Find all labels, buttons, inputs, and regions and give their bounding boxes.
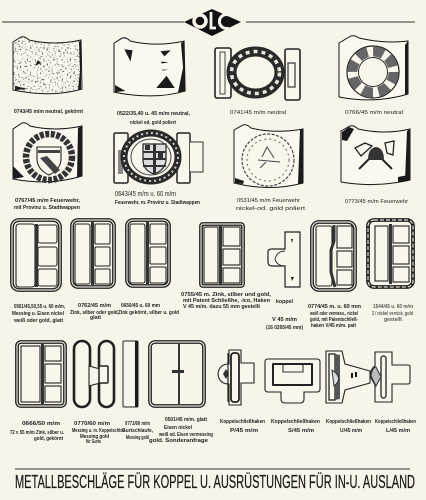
caption 0501 (149, 417, 213, 444)
caption 0773: 0773/45 m/m Feuerwehr (345, 199, 408, 205)
buckle 0501 (150, 342, 204, 406)
caption 0770: für Gurte (86, 439, 101, 445)
caption 0522 (117, 111, 191, 126)
caption hook L: L/45 m/m (386, 428, 410, 434)
buckle 0650 (127, 220, 169, 286)
caption 0561: weiß oder gold, glatt (13, 318, 63, 324)
caption 0762: Zink, silber oder gold, (70, 310, 120, 316)
caption 0522: 0522/35,40 u. 45 m/m neutral, (117, 111, 191, 117)
hook S (265, 359, 320, 403)
caption 0774: weiß oder vermess., nickel (309, 311, 358, 317)
caption hook P: Koppelschließhaken (220, 419, 265, 425)
caption 0531 (236, 198, 306, 212)
footer rule (15, 468, 410, 470)
caption 0643 (115, 191, 200, 206)
caption koppel (266, 299, 303, 331)
caption koppel: (16 0265/45 mm) (266, 325, 303, 331)
caption 0501: 0501/45 m/m. glatt (165, 417, 207, 423)
caption hook P: P/45 m/m (230, 428, 258, 434)
caption 0762: glatt (90, 315, 101, 321)
caption 0767 (14, 198, 81, 211)
caption 0522: nickel od. gold poliert (130, 120, 176, 126)
caption 0666: 0666/50 m/m (22, 421, 60, 427)
caption 0774: 0774/45 m. u. 60 mm (308, 304, 361, 310)
caption 0770: Messing gold (80, 434, 109, 440)
caption 0741: 0741/45 m/m neutral (230, 110, 286, 116)
caption 1544 (372, 304, 413, 323)
caption 0774: gold, mit Patentschließ- (310, 317, 358, 323)
plate 0767 with crest (13, 123, 82, 182)
caption 0762: 0762/45 m/m (78, 303, 111, 309)
caption 0755: mit Patent Schließhe, -ico, Haken (183, 298, 270, 304)
caption 0770: Messing u. m. Koppelschloß (72, 428, 126, 434)
caption 0650: 0650/45 u. 60 mm (121, 303, 160, 309)
caption 0666: gold, gekörnt (34, 436, 63, 442)
buckle 1544 (368, 220, 413, 287)
caption 0774 (308, 304, 361, 329)
plate 0766 with wheel (339, 36, 408, 100)
caption 0501: Eisen nickel (164, 425, 193, 431)
koppel hook V (268, 232, 300, 287)
plate 0773 with crossed axes and helmet (341, 126, 410, 185)
buckle 0741 with wreath (215, 48, 300, 100)
hook P (218, 350, 254, 405)
caption 0767: mit Provinz u. Stadtwappen (14, 205, 80, 211)
caption 0755: 0755/45 m. Zink, silber und gold, (181, 292, 272, 298)
hook U (326, 351, 370, 403)
caption 0501: weiß od. Eisen vermessing (158, 432, 213, 438)
caption 0561: Messing u. Eisen nickel (12, 311, 64, 317)
caption 0771 (122, 421, 154, 441)
caption 0650: Zink gekörnt, silber u. gold (118, 310, 179, 316)
caption 0650 (118, 303, 179, 316)
buckle 0755 (201, 224, 243, 286)
caption 0561: 0561/45,50,55 u. 60 m/m, (14, 304, 65, 310)
caption 0531: nickel-od. gold poliert (236, 206, 306, 212)
buckle 0762 (72, 220, 114, 287)
caption hook P (220, 419, 265, 434)
caption koppel: koppel (276, 299, 294, 305)
caption 1544: 2 / nickel vernick. gold (372, 311, 413, 317)
caption koppel: V 45 m/m (272, 317, 297, 323)
caption 0501: gold. Sonderanfrage (149, 438, 208, 444)
caption 0770 (72, 421, 126, 445)
caption 0643: Feuerwehr, m. Provinz u. Stadtwappen (115, 200, 200, 206)
caption hook L (375, 419, 416, 434)
caption 0666: 72 x 55 m/m Zink, silber u. (10, 430, 64, 436)
caption 0774: haken V/45 m/m. patt (311, 323, 356, 329)
caption 0666 (10, 421, 64, 442)
caption 0767: 0767/45 m/m Feuerwehr, (15, 198, 81, 204)
caption 1544: gestellt (384, 317, 402, 323)
caption 0770: 0770/60 m/m (74, 421, 110, 427)
hook L (370, 352, 410, 402)
caption hook S (271, 419, 320, 434)
plate 0531 (234, 125, 303, 188)
caption 0771: Gurtschlaufe, (122, 428, 154, 434)
caption 0762 (70, 303, 120, 321)
caption 0755 (181, 292, 272, 310)
caption hook S: Koppelschließhaken (271, 419, 320, 425)
caption 0771: Messing gold (126, 435, 149, 441)
caption hook U (326, 419, 371, 434)
buckle 0643 with city arms (114, 133, 203, 183)
buckle 0561 (12, 220, 60, 290)
buckle 0770 double loop (74, 341, 114, 407)
plate 0522 (114, 38, 185, 96)
logo: OLC diamond with header rule (2, 9, 415, 36)
caption 0531: 0531/45 m/m Feuerwehr (237, 198, 300, 204)
caption hook U: U/45 m/m (340, 428, 362, 434)
caption 0755: V 45 m/m. dazu 55 mm gestellt (183, 304, 260, 310)
caption 0771: 0771/60 m/m (125, 421, 150, 427)
caption 0643: 0643/45 m/m u. 60 m/m (115, 191, 176, 198)
plate 0743 (13, 37, 82, 94)
buckle 0774 (312, 222, 355, 290)
caption hook U: Koppelschließhaken (326, 419, 371, 425)
caption 0561 (12, 304, 65, 324)
caption 0766: 0766/45 m/m neutral (345, 110, 403, 116)
buckle 0666 (17, 342, 65, 406)
caption 0743: 0743/45 m/m neutral, gekörnt (14, 109, 83, 115)
caption 1544: 1544/45 u. 60 m/m (373, 304, 413, 310)
caption hook L: Koppelschließhaken (375, 419, 416, 425)
caption hook S: S/45 m/m (288, 428, 314, 434)
loop 0771 (123, 341, 138, 407)
